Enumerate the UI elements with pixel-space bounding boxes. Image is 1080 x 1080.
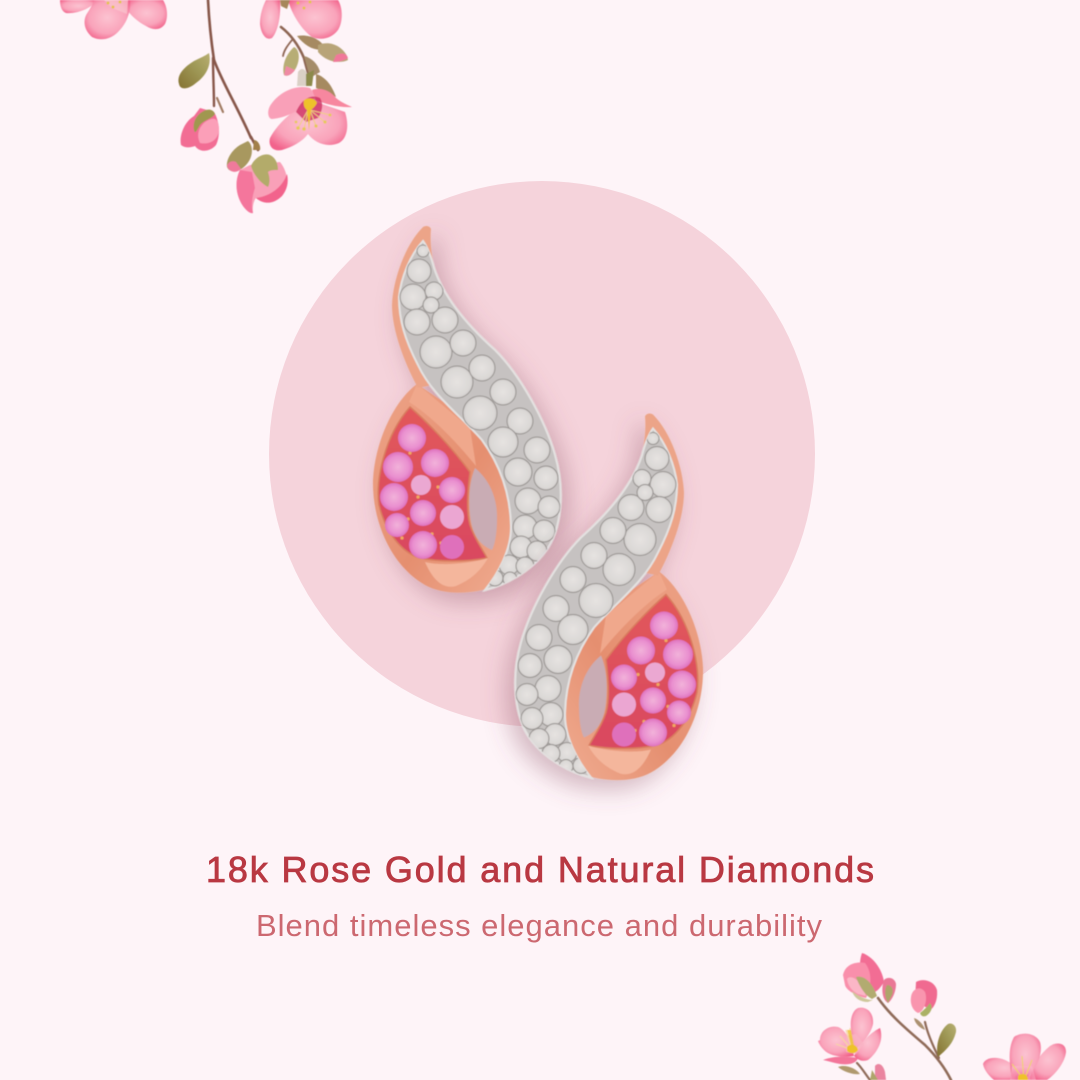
bud: pink with sepal (181, 108, 219, 151)
branch stems right (281, 27, 310, 82)
earring: left (373, 226, 561, 593)
silver pave swoosh (399, 241, 561, 590)
bud: green small (227, 140, 260, 172)
flower: top center, cut off (260, 0, 342, 39)
small bud sepal (885, 985, 893, 1003)
blossom: half open lower (237, 154, 288, 213)
rose gold edge strip (392, 226, 434, 388)
flower bud: large upper (843, 953, 884, 1002)
branch stems left (208, 0, 258, 150)
blossom: lower left (818, 1008, 881, 1064)
gold band highlight (409, 384, 476, 466)
gold base highlight (425, 558, 488, 587)
softened earring artwork (373, 226, 561, 593)
gold frame opening (469, 468, 497, 550)
sepals and small buds (283, 36, 348, 97)
blossom branch: top left (60, 0, 352, 213)
pink sapphires (380, 424, 465, 559)
heading: 18k Rose Gold and Natural Diamonds (206, 849, 874, 890)
flower bud: right (911, 980, 937, 1016)
pave diamonds (400, 245, 560, 586)
bud under blossom (838, 1064, 886, 1080)
flower: cut off at top left (60, 0, 167, 39)
subheading: Blend timeless elegance and durability (256, 908, 822, 943)
pink backdrop circle (269, 181, 815, 727)
small bud next to large bud (882, 978, 896, 1003)
red gem panel (378, 407, 487, 561)
teardrop rose gold frame (373, 384, 515, 593)
leaf (178, 53, 210, 88)
blossom branch: bottom right (818, 953, 1066, 1080)
leaf (937, 1023, 956, 1057)
gold prongs (392, 451, 446, 545)
blossom: cut off bottom right (983, 1034, 1066, 1080)
earring: right (515, 413, 703, 780)
blossom: open with yellow stamen (268, 87, 352, 150)
small sepal on stem (914, 1018, 925, 1030)
main branch stems (857, 998, 951, 1080)
